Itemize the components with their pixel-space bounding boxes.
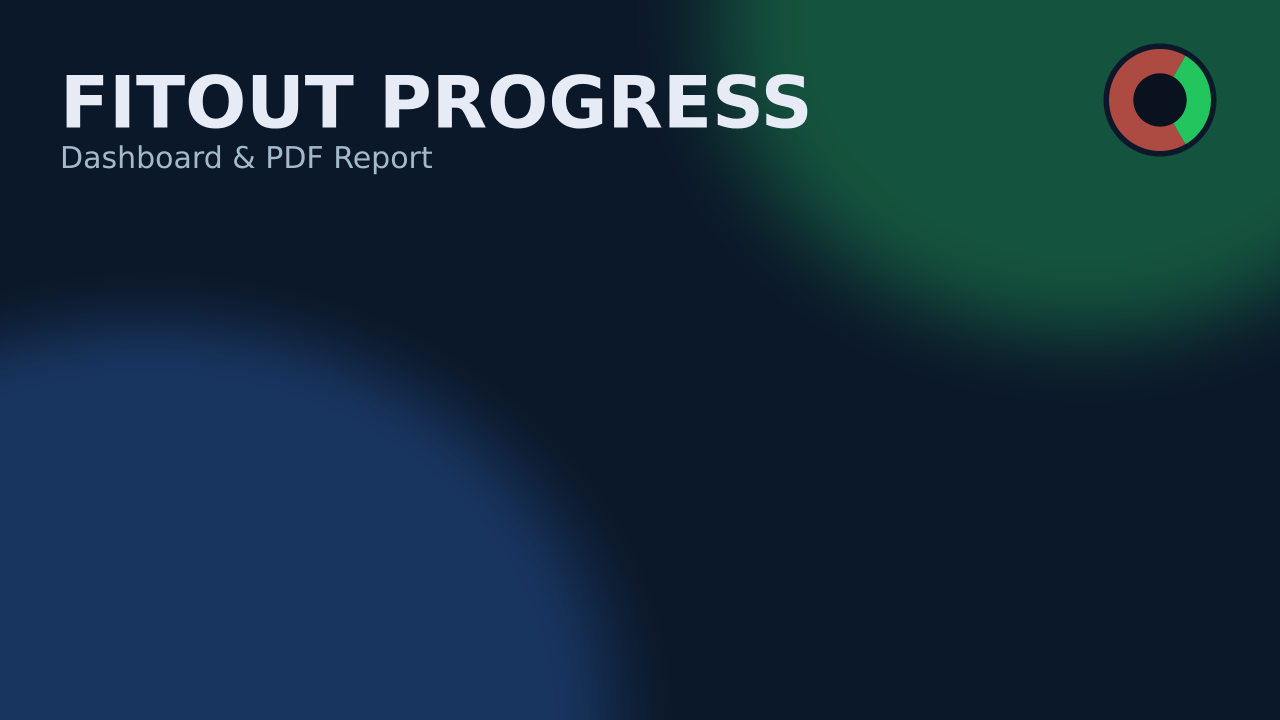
donut outer ring bbox=[1104, 44, 1216, 156]
donut centre bbox=[1133, 73, 1187, 127]
background glow: green bbox=[600, 0, 1280, 440]
donut segment: remaining bbox=[1109, 49, 1186, 151]
background glow: blue bbox=[0, 220, 720, 720]
donut segment: complete bbox=[1160, 56, 1211, 144]
title: FITOUT PROGRESS bbox=[60, 60, 813, 144]
donut chart bbox=[1104, 44, 1216, 156]
subtitle: Dashboard & PDF Report bbox=[60, 141, 433, 176]
